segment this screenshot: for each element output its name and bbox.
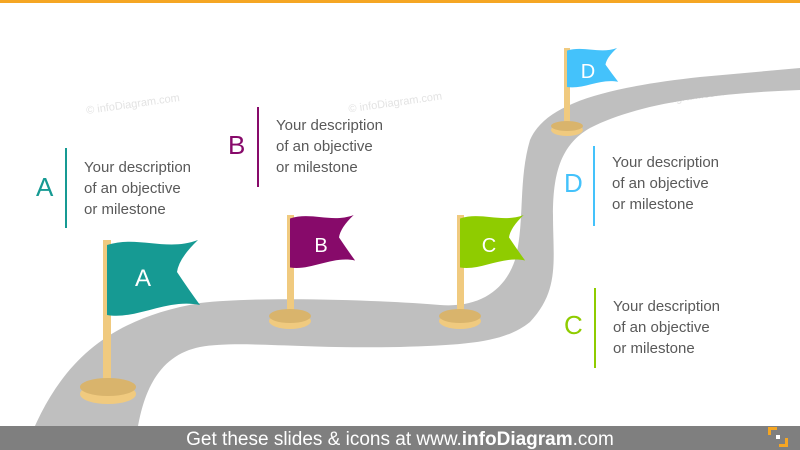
flag A xyxy=(80,240,200,404)
text C: of an objective xyxy=(613,319,710,336)
text C: Your description xyxy=(613,298,720,315)
flag C xyxy=(439,215,525,329)
text C: C xyxy=(564,310,583,340)
text D xyxy=(564,146,719,226)
flag D xyxy=(551,48,618,136)
text A xyxy=(36,148,191,228)
text B: of an objective xyxy=(276,138,373,155)
watermarks: © infoDiagram.com xyxy=(85,92,181,117)
footer: Get these slides & icons at www.infoDiagram.com xyxy=(186,429,614,450)
flag B xyxy=(269,215,355,329)
flag B: B xyxy=(314,235,328,257)
text B: Your description xyxy=(276,117,383,134)
text D: Your description xyxy=(612,154,719,171)
text D: D xyxy=(564,168,583,198)
text A: A xyxy=(36,172,54,202)
text A: or milestone xyxy=(84,201,166,218)
watermarks xyxy=(85,17,725,186)
text B: B xyxy=(228,130,245,160)
flag C: C xyxy=(482,235,496,257)
text D: of an objective xyxy=(612,175,709,192)
flag D: D xyxy=(581,61,595,83)
text C: or milestone xyxy=(613,340,695,357)
text A: Your description xyxy=(84,159,191,176)
flag A: A xyxy=(135,265,151,292)
watermarks: © infoDiagram.com xyxy=(630,86,725,111)
text B xyxy=(228,107,383,187)
text A: of an objective xyxy=(84,180,181,197)
footer xyxy=(0,426,800,450)
text B: or milestone xyxy=(276,159,358,176)
watermarks: © infoDiagram.com xyxy=(348,90,443,115)
top bar xyxy=(0,0,800,3)
text C xyxy=(564,288,720,368)
logo xyxy=(768,427,788,447)
text D: or milestone xyxy=(612,196,694,213)
